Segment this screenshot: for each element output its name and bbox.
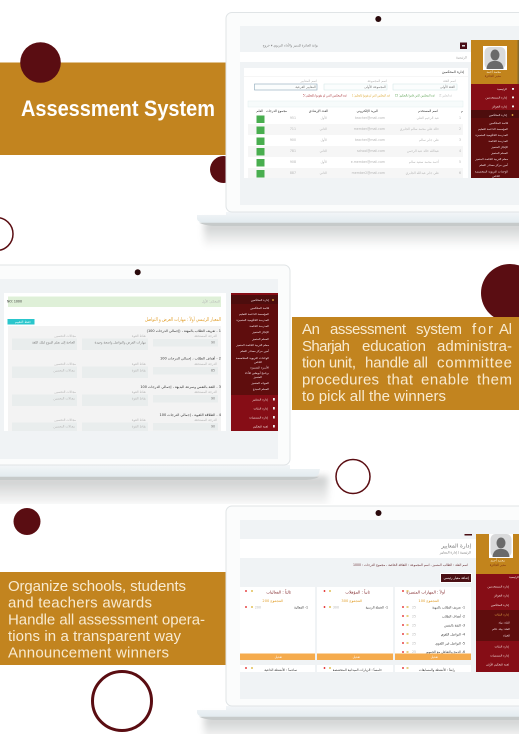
sidebar menu: برنامج أبوظبي للأداء [245, 371, 269, 375]
table rows: 900 [290, 138, 296, 142]
features text: Organize schools, students [8, 578, 186, 595]
decorative circle: below title banner [210, 156, 237, 183]
sidebar menu [471, 87, 519, 178]
first criteria items: 4- التواصل اللغوي [441, 632, 465, 636]
decorative ring: left edge [0, 218, 13, 250]
judges status counts: عدد المحكمين الذين لم يقوموا بالتحكيم: 5 [303, 94, 347, 98]
filter labels [300, 80, 456, 83]
description text: for [472, 321, 493, 338]
second row cards: رابعاً : الأنشطة والمسابقات [419, 667, 455, 672]
question 1: الدرجة المستحقة [194, 334, 217, 338]
sidebar menu: الفئة: بيئة عالم [492, 627, 510, 631]
question 3 [12, 385, 221, 406]
sidebar 2 [231, 293, 278, 431]
section heading: المعيار الرئيسي أولاً : مهارات العرض و التواصل [145, 315, 221, 323]
sidebar menu: الموجه المتميز [251, 381, 269, 385]
sidebar menu: الحياة [503, 634, 510, 638]
laptop 2: evaluation form [0, 265, 328, 508]
green action buttons [256, 116, 264, 178]
table rows [248, 115, 463, 178]
table rows: علي جابر عبدالله الجابري [406, 171, 439, 175]
laptop 3 screen [240, 520, 519, 699]
footer button labels: تعديل [353, 655, 360, 659]
card footer [317, 654, 393, 660]
table rows: 1 [459, 116, 461, 120]
gold banner: features [0, 572, 226, 665]
laptop 1 top bar [263, 42, 467, 60]
features text: and teachers awards [8, 594, 152, 612]
description text: assessment [330, 321, 407, 338]
table rows: school@mail.com [357, 149, 385, 153]
question 2: 2 - أهداف الطلاب ، إجمالي الدرجات 100 [160, 356, 221, 362]
card heading: إدارة المحكمين [442, 70, 464, 75]
description text: to pick all the winners [302, 388, 446, 405]
description text: committee [437, 354, 512, 372]
sidebar menu: الرئيسية [497, 87, 507, 91]
card: third criteria [240, 587, 315, 660]
laptop 1 top bar: بوابة الجائزة للتميز والأداء التربوي ▾ خروج [263, 42, 318, 48]
question 2: نقاط القوة [132, 368, 146, 372]
table rows: teacher@mail.com [355, 116, 385, 120]
sidebar menu: المعلم المبدع [253, 387, 269, 391]
question 2: مجالات التحسين [53, 368, 75, 372]
cyan button: حفظ التقييم [15, 320, 31, 324]
laptop 3: criteria management [197, 506, 519, 734]
question 1: نقاط القوة [132, 334, 146, 338]
sidebar menu: الفئة: بيئة [498, 620, 510, 624]
table rows: الأول [320, 137, 327, 142]
footer button labels [274, 656, 438, 658]
sidebar 3: مدير الجائزة [490, 563, 506, 567]
first criteria items: 5- التواصل غير اللغوي [435, 642, 465, 646]
table header: م [461, 109, 463, 114]
question 3: نقاط القوة [132, 396, 146, 400]
first criteria items: 1- تعريف الطلاب بالمهنة [432, 606, 465, 610]
page header: إدارة المعايير [440, 544, 471, 550]
table rows: e.member@mail.com [351, 160, 385, 164]
sidebar 1 [471, 40, 519, 178]
question 3: الدرجة المستحقة [194, 390, 217, 394]
features text [8, 578, 205, 662]
decorative ring: bottom [92, 672, 152, 730]
sidebar menu: إدارة المحكمين [491, 603, 509, 608]
panel: evaluation form [4, 293, 226, 434]
description text: Al [499, 321, 512, 338]
criteria info line: اسم الفئة : الطالب المتميز ، اسم المجموعة : الثقافة الخاصة ، مجموع الدرجات : 1000 [353, 563, 468, 567]
title: Assessment System [21, 96, 215, 121]
question 1 [12, 329, 221, 350]
question 4: مجالات التحسين [54, 418, 76, 422]
sidebar menu: الأسرة المتميزة [250, 366, 269, 370]
card: third criteria: ثالثاً : الفعاليات [266, 589, 291, 594]
description text: Sharjah [302, 338, 350, 355]
sidebar menu: الإنجاز المتميز [490, 145, 508, 150]
card footer [240, 654, 315, 660]
sidebar 1: محمد أحمد [486, 69, 501, 74]
second row cards: سادساً : الأنشطة الداعية [264, 667, 297, 672]
description text: enable [421, 372, 469, 388]
sidebar menu: أمين مركز مصادر التعلم [240, 349, 269, 353]
table rows: member@mail.com [354, 127, 385, 131]
sidebar menu: إدارة الجوائز [491, 104, 507, 110]
card: first criteria: المجموع 100 [418, 599, 439, 603]
question 3: 90 [211, 396, 215, 400]
first criteria items: 25 [412, 624, 416, 628]
table rows: 711 [290, 127, 296, 131]
sidebar menu: إدارة الفئات [495, 644, 509, 650]
dark button: إضافة معيار رئيسي [444, 576, 469, 581]
sidebar menu: إدارة المستخدمين [485, 96, 507, 100]
card: first criteria: أولاً : المهارات المتميزة [406, 589, 445, 594]
table rows: الأول [320, 159, 327, 164]
table rows: علي جابر سالم [419, 138, 439, 142]
question 2: 85 [211, 368, 215, 372]
judges status counts [303, 94, 452, 98]
sidebar menu: الوحدات التربوية المتخصصة [236, 356, 269, 360]
page header [240, 539, 476, 558]
sidebar menu: قائمة المحكمين [250, 306, 270, 310]
description text: system [416, 321, 462, 338]
filter labels: اسم الفئة [443, 79, 456, 83]
top bar toggle [464, 534, 472, 536]
question 2: الدرجة المستحقة [194, 362, 217, 366]
card: second criteria: المجموع 300 [341, 599, 362, 603]
laptop 1 base [197, 212, 519, 248]
sidebar menu: الإنجاز المتميز [251, 330, 269, 335]
card: third criteria: المجموع 200 [262, 599, 283, 603]
table rows: 4 [459, 149, 461, 153]
sidebar menu: إدارة الجوائز [493, 594, 509, 598]
decorative circle: top left [20, 42, 61, 83]
first criteria items: 2- أهداف الطلاب [442, 614, 465, 618]
gold banner: description [292, 317, 519, 410]
filter selects: المجموعة الأولى [364, 84, 386, 89]
table header: البريد الإلكتروني [357, 109, 378, 114]
features text: Handle all assessment opera- [8, 612, 205, 628]
gold banner: title background [0, 62, 226, 155]
question 1: الحاجة إلى تعلم التنوع لتلك اللغة [32, 340, 75, 346]
sidebar menu: إدارة المحكمين [489, 113, 507, 118]
sidebar menu [486, 575, 519, 666]
sidebar menu: الوحدات التربوية المتخصصة [475, 170, 508, 174]
features text: tions in a transparent way [8, 628, 182, 645]
first criteria items: 3- الثقة بالنفس [444, 624, 465, 628]
table rows: 3 [459, 138, 461, 142]
table rows: teacher@mail.com [355, 138, 385, 142]
description text: An [302, 321, 320, 338]
filter selects: المعايير الفرعية [295, 85, 316, 89]
description text: procedures [302, 372, 379, 388]
sidebar menu: المتميز [253, 375, 262, 379]
question 4: نقاط القوة [132, 418, 146, 422]
sidebar menu: المدرسة الحكومية المتميزة [475, 133, 508, 137]
sidebar menu: لجنة التحكيم [253, 424, 268, 428]
success alert: المحكم: الأول [202, 298, 220, 304]
description text: handle all [365, 354, 428, 372]
sidebar menu: معلم التربية الخاصة المتميز [235, 343, 269, 347]
table header: العلم [256, 109, 263, 113]
description text: education [362, 338, 426, 355]
description text: administra- [437, 338, 512, 355]
laptop 1 screen [240, 26, 519, 205]
laptop 1: dashboard judges list [197, 12, 519, 248]
avatar [489, 534, 513, 558]
success alert: NO: 1000 [7, 300, 22, 304]
sidebar menu [235, 298, 275, 428]
table header: العدد الإرشادي [309, 109, 328, 114]
table rows: أحمد محمد سعيد سالم [409, 159, 439, 164]
description text [302, 321, 512, 405]
first criteria items: 25 [412, 650, 416, 654]
question 3: نقاط القوة [132, 390, 146, 394]
question 2: نقاط القوة [132, 362, 146, 366]
description text: that [387, 372, 414, 388]
table rows: 6 [459, 171, 461, 175]
first criteria items: 25 [412, 614, 416, 618]
filter labels: اسم المجموعة [367, 79, 387, 83]
question 3: 3 - الثقة بالنفس وسرعة البديهة ، إجمالي الدرجات 100 [140, 385, 221, 390]
table rows: 2 [459, 127, 461, 131]
laptop 2 screen [0, 279, 278, 459]
sidebar menu: المدرسة الحكومية المتميزة [236, 318, 269, 322]
question list [8, 326, 222, 434]
sidebar menu: المدرسة الخاصة [488, 139, 508, 143]
second row cards [240, 665, 471, 672]
sidebar menu: المؤسسة الداعمة للتعليم [239, 312, 269, 316]
question 4: 90 [211, 424, 215, 428]
sidebar menu: إدارة الفئات [254, 406, 268, 412]
card: second criteria: ثانياً : المؤهلات [345, 589, 370, 594]
question 4: 4 - الطلاقة اللغوية ، إجمالي الدرجات 100 [160, 413, 222, 418]
sidebar menu: إدارة المسميات [490, 654, 509, 658]
sidebar 3: محمد أحمد [490, 558, 505, 562]
description text: them [477, 372, 512, 388]
avatar [483, 46, 507, 70]
table rows: 5 [459, 160, 461, 164]
table rows: خالد علي محمد سالم الجابري [400, 127, 439, 131]
sidebar menu: الخاص [492, 174, 500, 178]
table rows: عبد الرحيم العلي [417, 116, 439, 120]
card: third criteria: 1- الفعالية [294, 606, 308, 610]
filter selects: الفئة الأولى [440, 84, 455, 89]
table rows: الثاني [320, 127, 327, 131]
table rows: 908 [290, 160, 296, 164]
dark button [440, 573, 472, 583]
sidebar 3 [476, 534, 519, 672]
sidebar menu: قائمة المحكمين [489, 121, 509, 125]
sidebar menu: الرئيسية [509, 575, 519, 579]
laptop 3 camera [376, 510, 382, 516]
question 2 [12, 356, 221, 378]
sidebar menu: المؤسسة الداعمة للتعليم [478, 127, 508, 131]
laptop 1 camera [375, 16, 381, 22]
table rows: عبدالله خالد عبد الرحمن [407, 149, 439, 153]
laptop 2 camera [135, 269, 141, 275]
sidebar menu: لجنة التحكيم الأولى [486, 662, 509, 666]
question 1: مهارات العرض والتواصل واضحة وجيدة [95, 340, 146, 344]
page header: الرئيسية / إدارة المعايير [439, 550, 471, 556]
sidebar menu: إدارة الفئات [495, 612, 509, 618]
table rows: الثاني [320, 171, 327, 175]
sidebar menu: إدارة المحكمين [251, 298, 269, 303]
table header: مجموع الدرجات [266, 109, 287, 113]
question 4: نقاط القوة [132, 424, 146, 428]
question 4 [12, 414, 221, 431]
sidebar menu: أمين مركز مصادر التعلم [479, 163, 508, 167]
question 4: الدرجة المستحقة [194, 418, 217, 422]
question 1: 90 [211, 340, 215, 344]
sidebar menu: الخاص [254, 360, 262, 364]
table rows: 887 [290, 171, 296, 175]
question 3: مجالات التحسين [53, 396, 75, 400]
sidebar menu: إدارة المستخدمين [487, 584, 509, 590]
filter labels: اسم المعايير [299, 79, 317, 83]
question 1: 1 - تعريف الطلاب بالمهنة ، (إجمالي الدرجات 100) [147, 329, 221, 334]
sidebar menu: معلم التربية الخاصة المتميز [474, 157, 508, 161]
table rows: الثاني [320, 149, 327, 153]
judges status counts: عدد المحكمين الذين لم يقوموا بالتحكيم: 1 [352, 94, 390, 98]
decorative circle: lower left [14, 508, 40, 535]
second row cards: خامساً : الزيارات الميدانية المتخصصة [333, 667, 382, 672]
footer button labels: تعديل [275, 655, 282, 659]
judges status counts: عدد المحكمين: 15 [439, 94, 452, 98]
table rows: 951 [290, 116, 296, 120]
first criteria items: 6- الدمج والتفاعل مع الجمهور [424, 650, 465, 654]
filter selects [254, 84, 457, 90]
search box [248, 101, 463, 107]
footer button labels: تعديل [431, 655, 438, 659]
first criteria items: 25 [412, 642, 416, 646]
laptop 2 base [0, 465, 328, 508]
question 3: مجالات التحسين [54, 390, 76, 394]
success alert [7, 296, 221, 307]
laptop 2 shell [0, 265, 290, 465]
card: second criteria: 300 [333, 606, 339, 610]
question 1: مجالات التحسين [54, 334, 76, 338]
table header: اسم المستخدم [418, 109, 438, 114]
card: second criteria [317, 587, 393, 660]
first criteria items: 25 [412, 606, 416, 610]
description text: tion unit, [302, 354, 356, 372]
features text: Announcement winners [8, 644, 169, 662]
panel: judges card [244, 68, 468, 178]
decorative ring: centre right [336, 460, 370, 494]
judges status counts: عدد المحكمين الذين قاموا بالتحكيم: 15 [395, 94, 435, 98]
card: third criteria: 200 [255, 606, 261, 610]
first criteria items [402, 606, 465, 654]
decorative circle: top right [481, 264, 519, 322]
card: second criteria: 1- الخطة الزمنية [366, 606, 388, 610]
table rows: member2@mail.com [352, 171, 385, 175]
laptop 3 base [197, 706, 519, 734]
table rows: الأول [320, 115, 327, 120]
sidebar menu: المعلم المتميز [251, 337, 269, 341]
sidebar 1: مدير الجائزة [485, 74, 501, 78]
first criteria items: 25 [412, 632, 416, 636]
laptop 1 top bar: الرئيسية [456, 56, 467, 60]
sidebar menu: المدرسة الخاصة [249, 324, 269, 328]
cyan button [8, 319, 34, 324]
question 4: مجالات التحسين [53, 424, 75, 428]
sidebar menu: المعلم المتميز [490, 151, 508, 155]
table rows: 781 [290, 149, 296, 153]
card: first criteria [395, 587, 471, 660]
question 2: مجالات التحسين [54, 362, 76, 366]
table header [256, 110, 463, 113]
sidebar menu: إدارة المسميات [249, 416, 268, 420]
card footer [395, 654, 471, 660]
sidebar menu: إدارة المعايير [251, 398, 268, 402]
laptop 3 shell [226, 506, 519, 706]
laptop 1 shell [226, 12, 519, 212]
